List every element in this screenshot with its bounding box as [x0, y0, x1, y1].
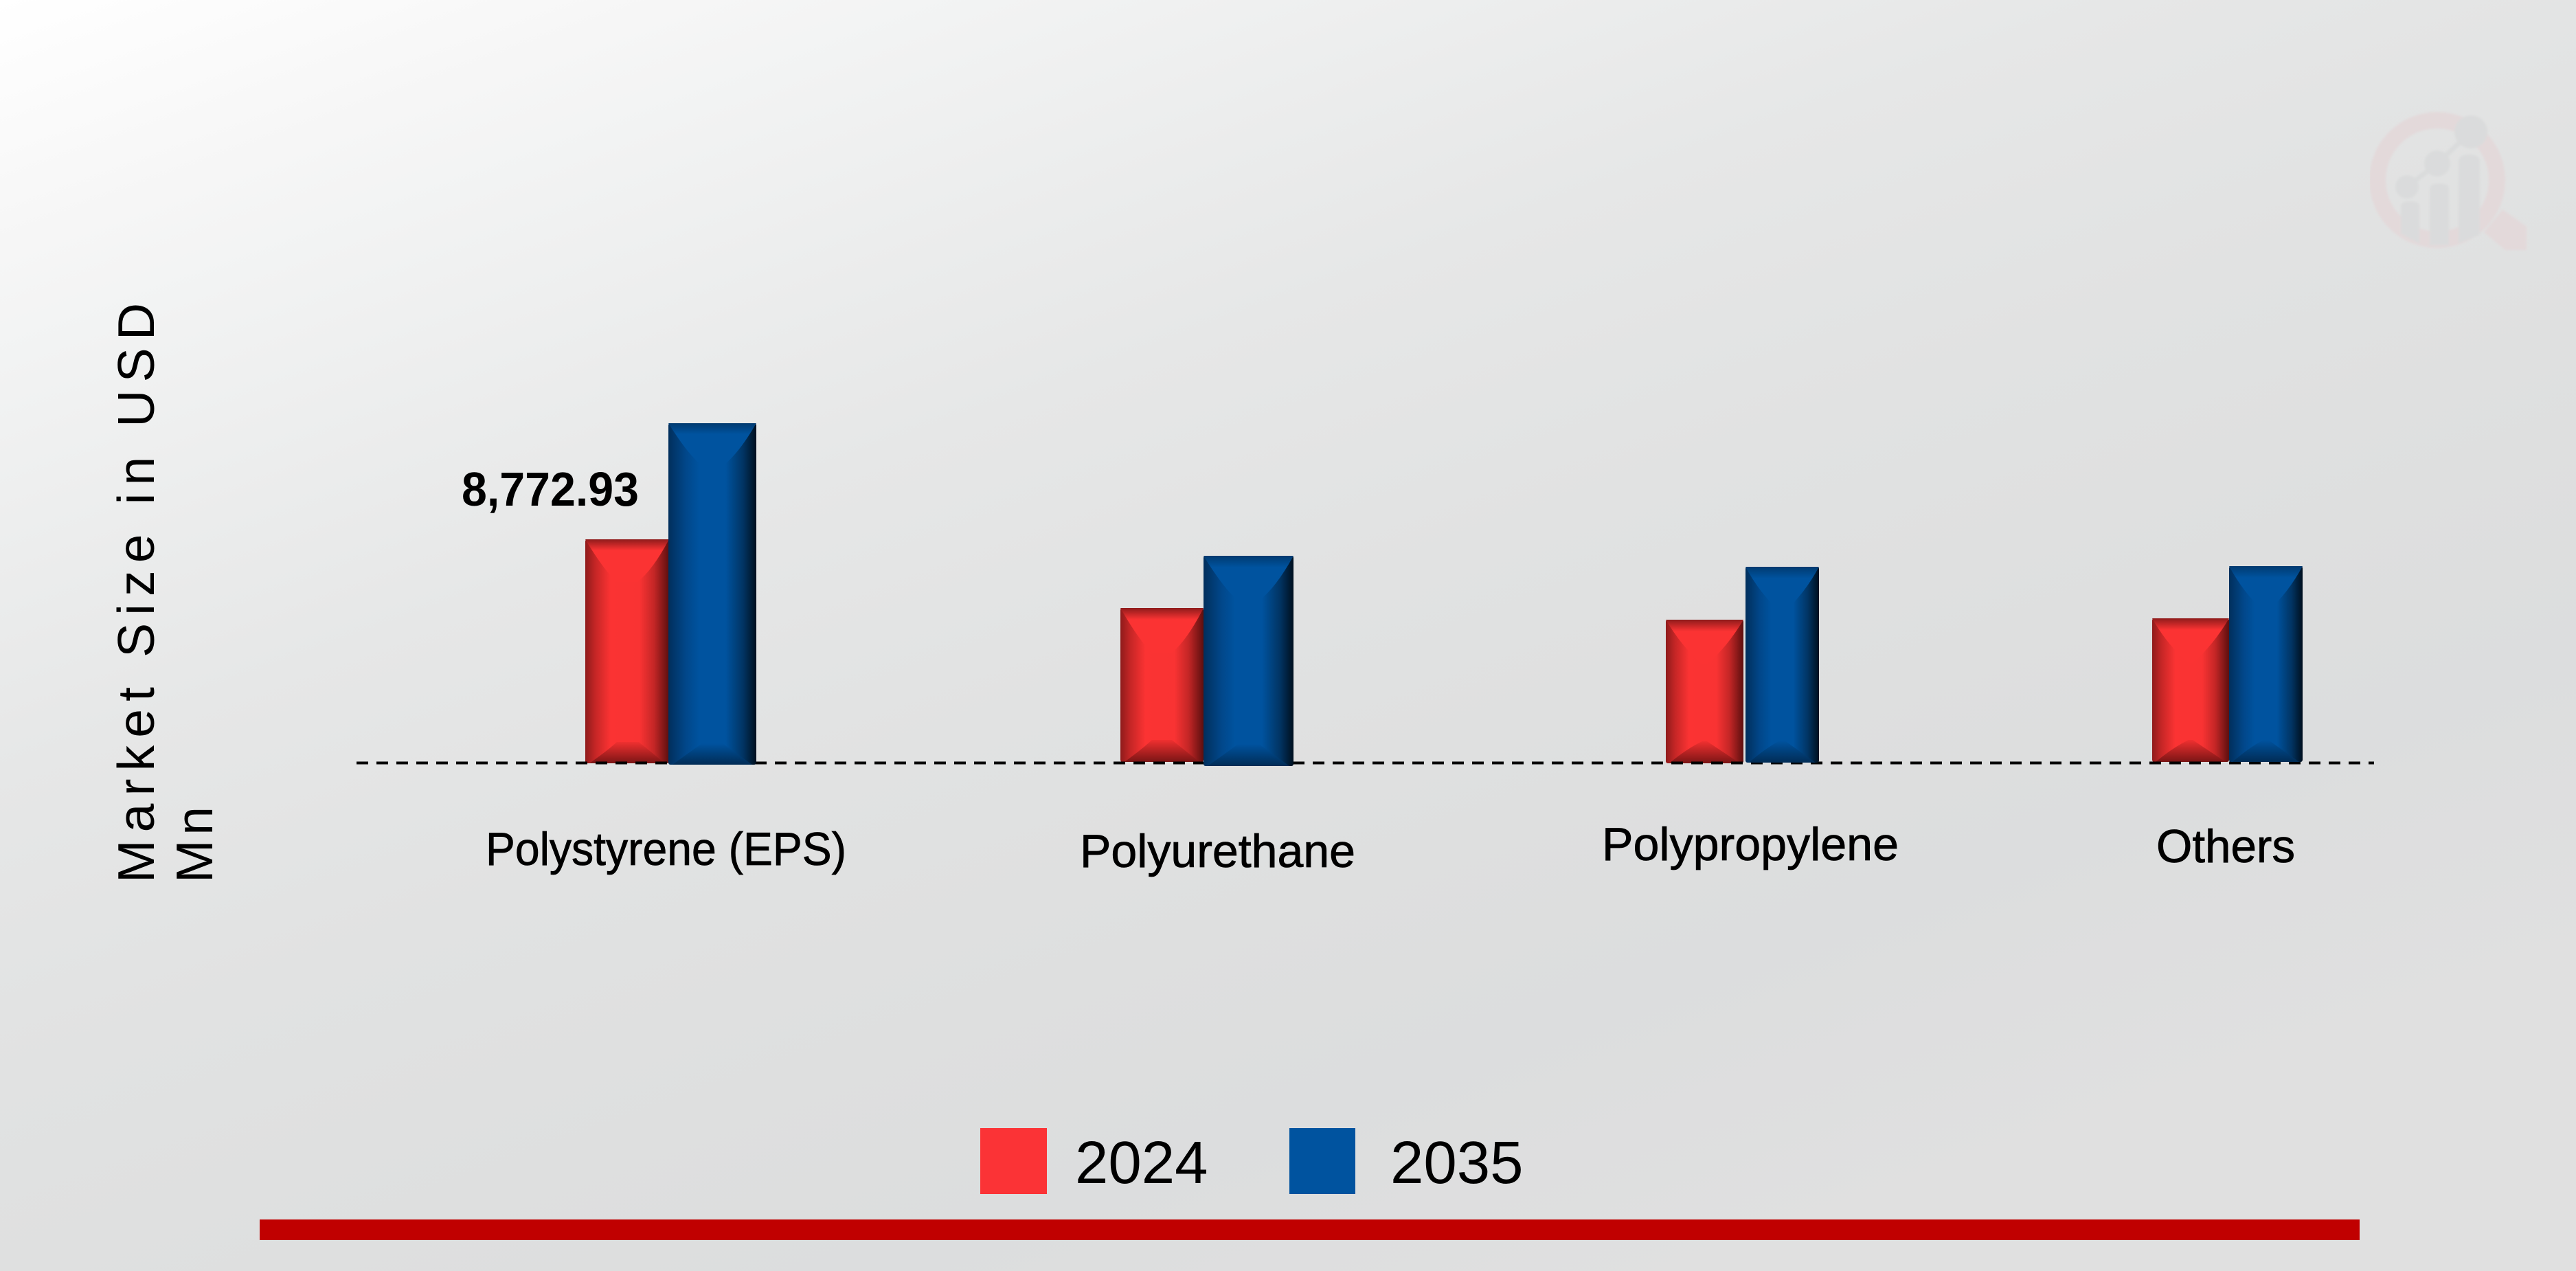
category labels	[486, 818, 2295, 877]
bar: Others 2035	[2229, 566, 2303, 762]
dashed baseline	[357, 761, 2374, 764]
category labels: Polystyrene (EPS)	[486, 823, 846, 875]
legend item 2024	[980, 1128, 1208, 1196]
chart bars and baseline	[357, 423, 2374, 766]
bar: Polyurethane 2035	[1204, 556, 1293, 766]
legend item 2024: 2024	[1075, 1129, 1208, 1196]
y-axis title: Market Size in USD	[107, 303, 165, 883]
y-axis title: Mn	[166, 807, 223, 883]
bar: Others 2024	[2152, 618, 2229, 762]
bars 2024	[585, 539, 2229, 763]
category labels: Polypropylene	[1602, 818, 1899, 870]
category labels: Others	[2156, 820, 2295, 873]
bar: Polyurethane 2024	[1120, 608, 1204, 762]
legend	[980, 1128, 1524, 1196]
category labels: Polyurethane	[1080, 825, 1355, 877]
footer red bar	[260, 1219, 2360, 1240]
bar: Polypropylene 2024	[1666, 620, 1743, 763]
bar: Polystyrene 2035	[668, 423, 756, 765]
legend item 2035	[1289, 1128, 1524, 1196]
bar: Polystyrene 2024	[585, 539, 669, 763]
bar: Polypropylene 2035	[1745, 567, 1819, 763]
y-axis title	[107, 303, 223, 883]
legend item 2035: 2035	[1390, 1129, 1524, 1196]
icon: watermark logo magnifier with bars	[2377, 115, 2527, 250]
value label: 8,772.93	[462, 462, 639, 516]
bars 2035	[668, 423, 2303, 766]
